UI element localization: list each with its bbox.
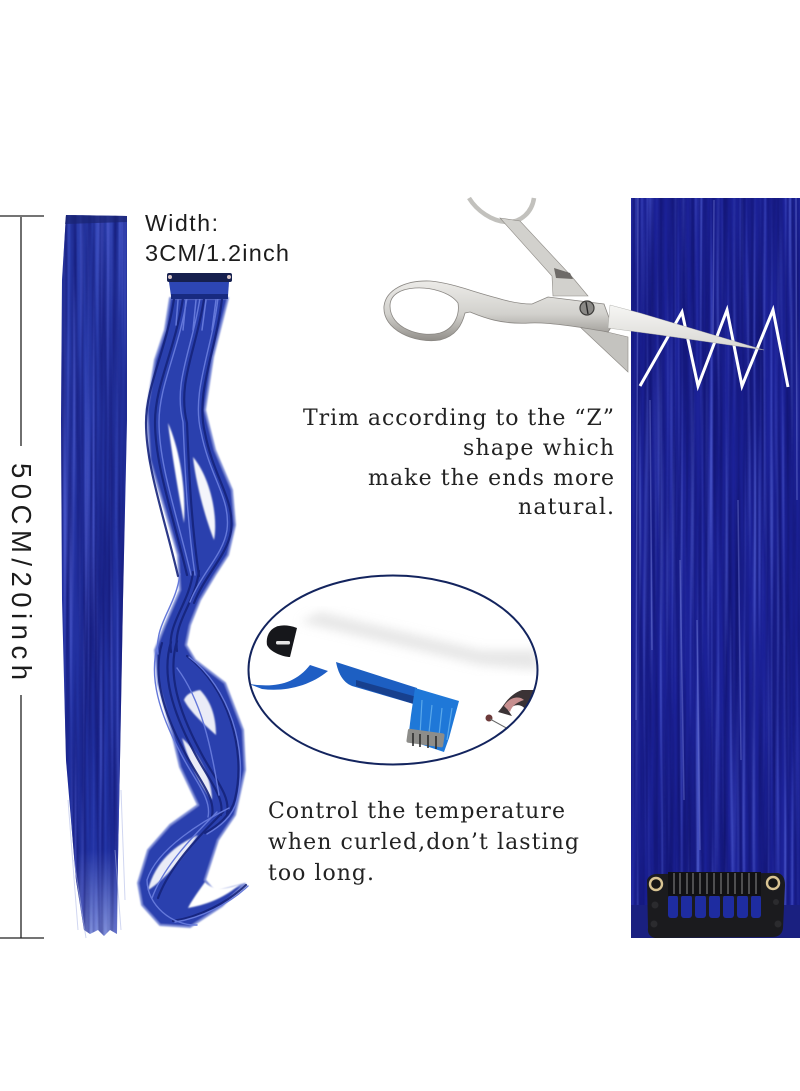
- screw: [580, 301, 594, 315]
- label: width of the clip: [145, 210, 289, 266]
- callout: curling iron close-up: [248, 575, 538, 765]
- straight blue hair extension: [61, 215, 127, 938]
- hair falling to clip: [408, 688, 459, 752]
- instruction: trimming: natural.: [518, 495, 614, 520]
- lower finger ring and arm: [384, 281, 612, 341]
- hair tail: [249, 665, 328, 690]
- instruction: temperature: too long.: [268, 861, 374, 886]
- small metal clip: [406, 729, 445, 748]
- dimension: hair length 50CM/20inch: 50CM/20inch: [6, 463, 37, 680]
- instruction: trimming: Trim according to the “Z”: [303, 406, 614, 431]
- top blade: [608, 305, 764, 350]
- iron hinge: [498, 690, 534, 716]
- label: width of the clip: Width:: [145, 210, 218, 236]
- icon: scissors: [384, 198, 764, 372]
- instruction: trimming: [303, 406, 614, 520]
- wrapped hair: [336, 662, 417, 705]
- instruction: trimming: make the ends more: [368, 466, 614, 491]
- hair clip: [647, 872, 785, 938]
- upper arm: [500, 218, 588, 296]
- instruction: temperature: Control the temperature: [268, 799, 565, 824]
- iron head: [267, 625, 297, 657]
- label: width of the clip: 3CM/1.2inch: [145, 240, 289, 266]
- hair silhouette: [138, 298, 245, 927]
- curly blue hair extension: [138, 273, 248, 927]
- hair clip top: [176, 300, 216, 330]
- upper ring fragment: [469, 198, 534, 222]
- panel: close-up of blue hair with clip: [631, 198, 800, 938]
- instruction: trimming: shape which: [463, 436, 614, 461]
- zigzag trim guide: [640, 310, 788, 387]
- iron shadow: [300, 612, 538, 670]
- instruction: temperature: [268, 799, 579, 886]
- gaps between strands: [148, 423, 240, 908]
- dark strands: [146, 298, 246, 921]
- instruction: temperature: when curled,don’t lasting: [268, 830, 579, 855]
- light strands: [147, 298, 248, 925]
- lower blade wedge: [578, 325, 628, 372]
